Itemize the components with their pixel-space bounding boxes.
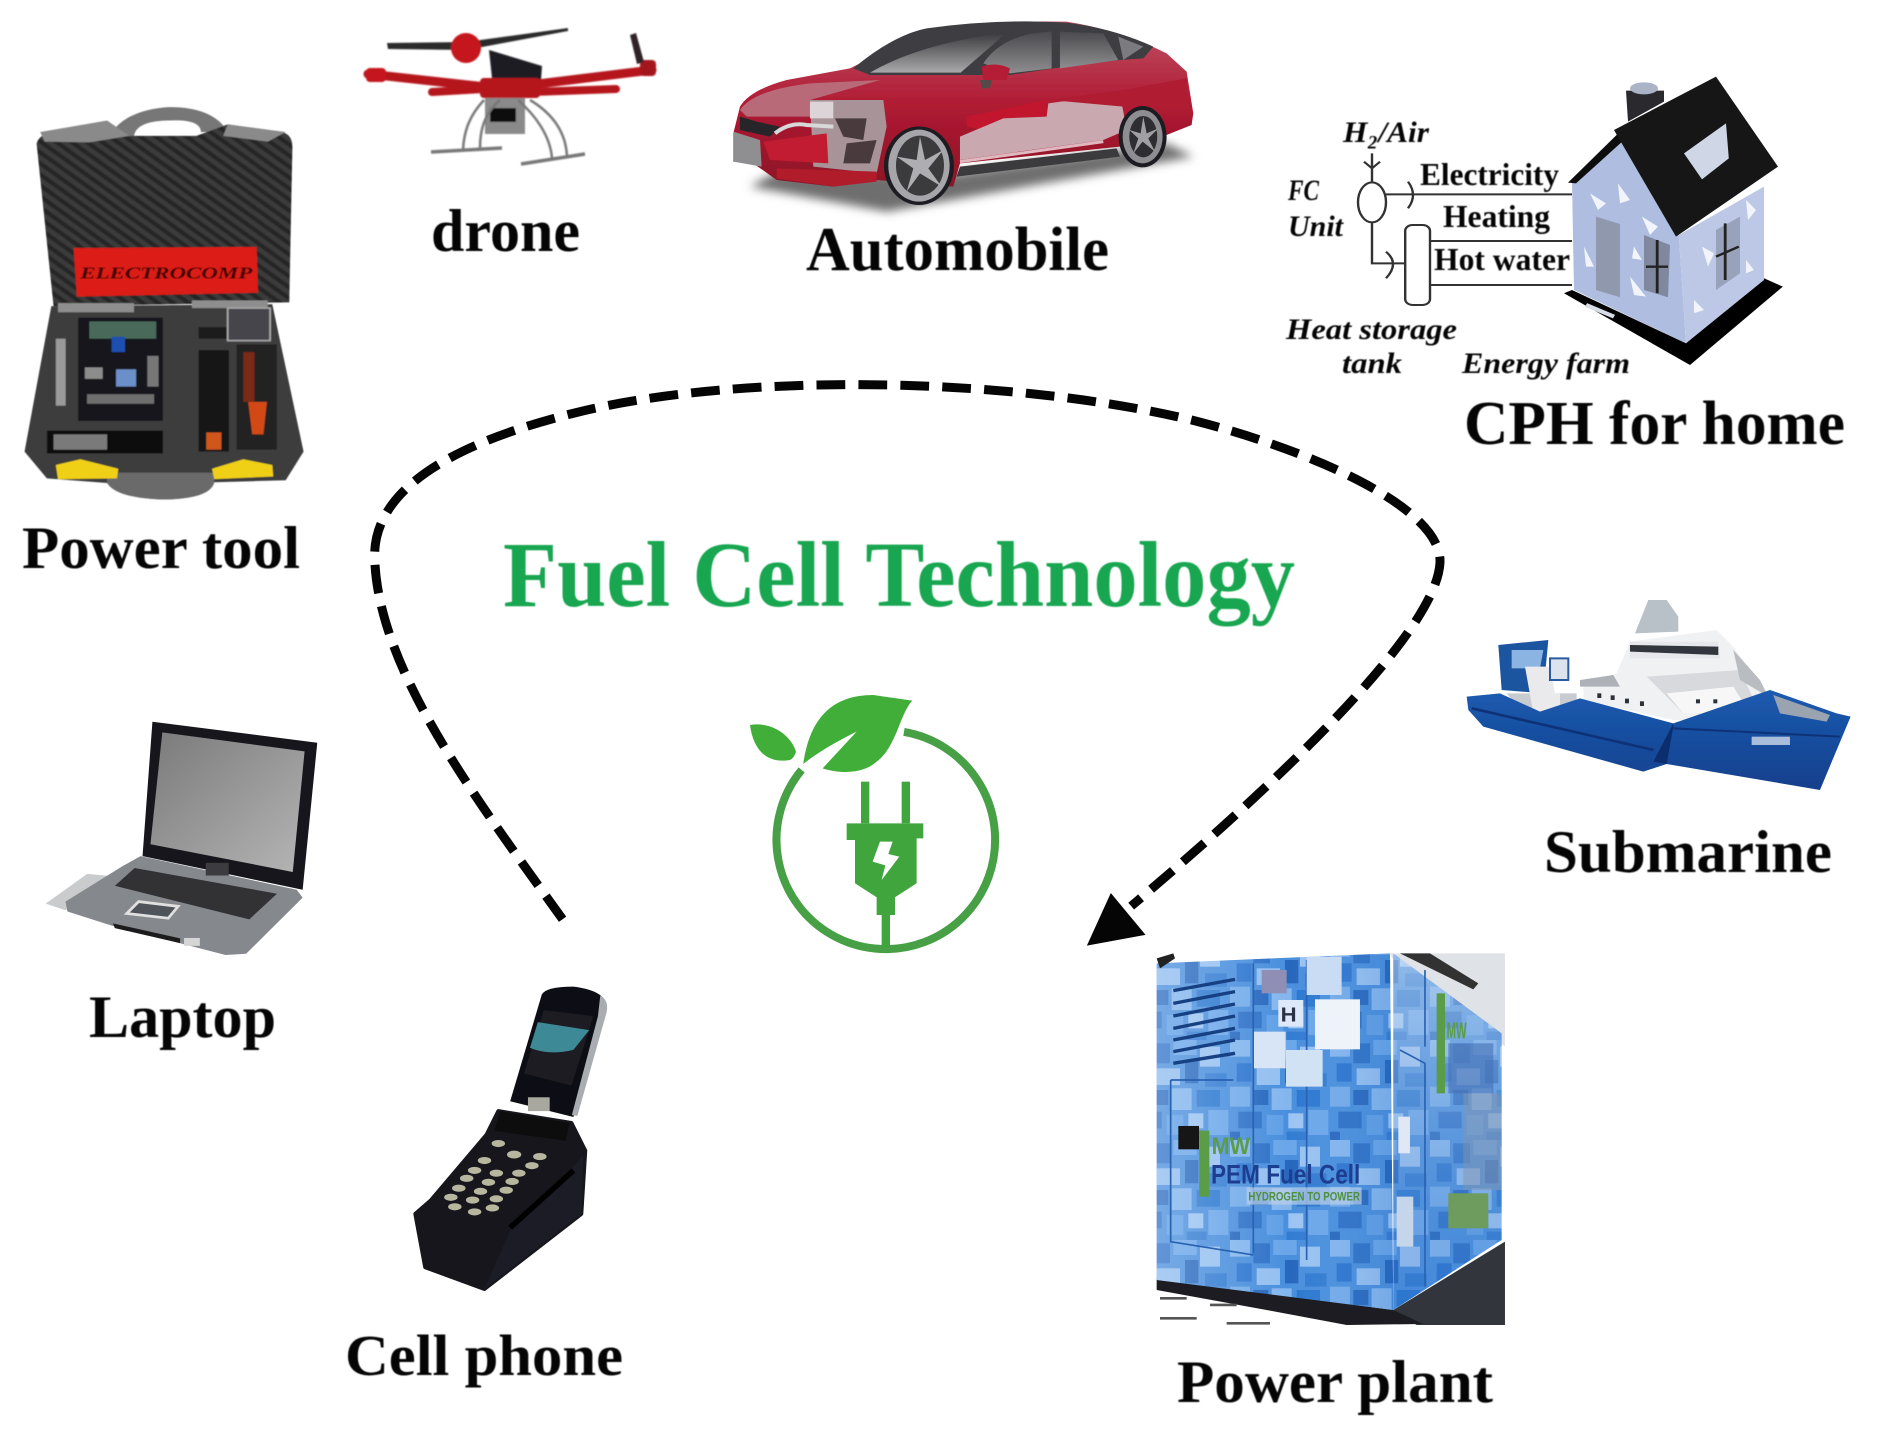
photo: PEM fuel cell container: MW (1447, 1017, 1467, 1043)
arrow: dashed cycle from cell phone to power plant (375, 385, 1440, 946)
icon: power tool case: ELECTROCOMP (79, 264, 253, 282)
panel: submarine (1467, 600, 1851, 885)
icon: ship (1467, 600, 1851, 790)
panel: power plant (1157, 953, 1505, 1415)
icon: automobile cutaway (733, 21, 1193, 212)
panel: CHP for home (1285, 77, 1845, 458)
label: power plant: Power plant (1177, 1349, 1493, 1415)
photo: PEM fuel cell container: HYDROGEN TO POWER (1248, 1190, 1360, 1204)
diagram labels: Energy farm (1461, 347, 1630, 380)
diagram labels: Unit (1288, 210, 1345, 243)
photo: PEM fuel cell container (1157, 953, 1505, 1325)
label: submarine: Submarine (1544, 819, 1832, 885)
diagram labels: tank (1342, 347, 1402, 380)
photo: PEM fuel cell container: MW (1212, 1133, 1250, 1160)
panel: power tool (22, 107, 304, 581)
label: power tool: Power tool (22, 515, 300, 581)
panel: cell phone (345, 987, 623, 1388)
icon: laptop (46, 722, 317, 955)
icon: house (1564, 77, 1783, 365)
label: laptop: Laptop (89, 984, 276, 1050)
photo: PEM fuel cell container: PEM Fuel Cell (1211, 1159, 1360, 1189)
panel: laptop (46, 722, 317, 1050)
diagram labels: Electricity (1420, 156, 1559, 192)
label: CHP for home: CPH for home (1464, 390, 1845, 458)
diagram labels: Heat storage (1285, 313, 1457, 346)
icon: leaf and plug (750, 695, 995, 949)
diagram: fuel cell to house (1358, 153, 1572, 305)
diagram labels: Hot water (1434, 241, 1570, 277)
title: Fuel Cell Technology (503, 524, 1295, 627)
diagram labels: Heating (1443, 198, 1550, 234)
panel: drone (366, 28, 656, 264)
diagram labels: H₂/Air (1342, 116, 1429, 149)
label: automobile: Automobile (806, 216, 1109, 284)
diagram labels (1285, 116, 1630, 380)
icon: power tool case (25, 107, 304, 499)
panel: automobile (733, 21, 1193, 284)
label: drone: drone (431, 198, 580, 264)
photo: PEM fuel cell container: H (1281, 1004, 1297, 1027)
label: cell phone: Cell phone (345, 1323, 623, 1388)
icon: flip phone (415, 987, 607, 1289)
icon: drone (366, 28, 656, 164)
diagram labels: FC (1287, 174, 1320, 207)
